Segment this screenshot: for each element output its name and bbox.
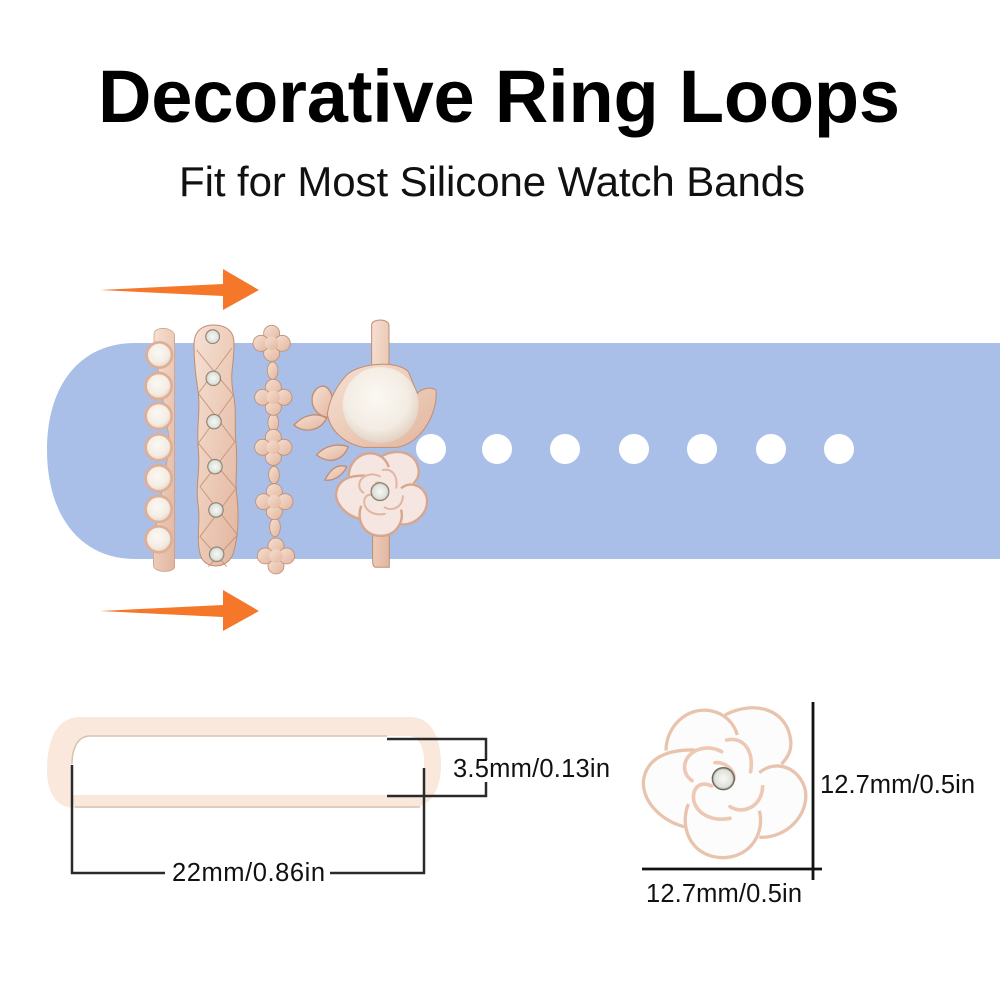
width label: 22mm/0.86in <box>172 859 325 887</box>
ring loop: pearl and camellia charm <box>294 320 436 567</box>
small enamel flower <box>336 452 427 536</box>
width label: 12.7mm/0.5in <box>646 880 802 908</box>
large pearl <box>343 367 419 443</box>
top and bottom bars <box>372 320 389 567</box>
subtitle: Fit for Most Silicone Watch Bands <box>179 158 805 205</box>
dimension lines <box>72 739 486 873</box>
inner shading lines <box>72 736 420 807</box>
watch band with holes <box>47 343 1000 559</box>
arrow: bottom orange <box>100 590 259 631</box>
pearl cup <box>327 364 436 447</box>
flower stone <box>371 483 389 501</box>
ring loop outline <box>47 717 441 808</box>
arrow: top orange <box>100 269 259 310</box>
leaves <box>294 386 348 480</box>
ring loop: pearl strip <box>146 328 175 571</box>
dimension lines <box>642 702 822 880</box>
height label: 12.7mm/0.5in <box>820 771 975 799</box>
diagram: ring loop dimensions <box>47 717 610 887</box>
ring loop: quilted rhinestone bar <box>194 325 238 567</box>
ring loop: clover chain <box>253 325 295 574</box>
diagram: camellia charm dimensions <box>642 702 975 908</box>
camellia flower <box>643 708 806 858</box>
title: Decorative Ring Loops <box>98 55 900 138</box>
height label: 3.5mm/0.13in <box>453 755 610 783</box>
